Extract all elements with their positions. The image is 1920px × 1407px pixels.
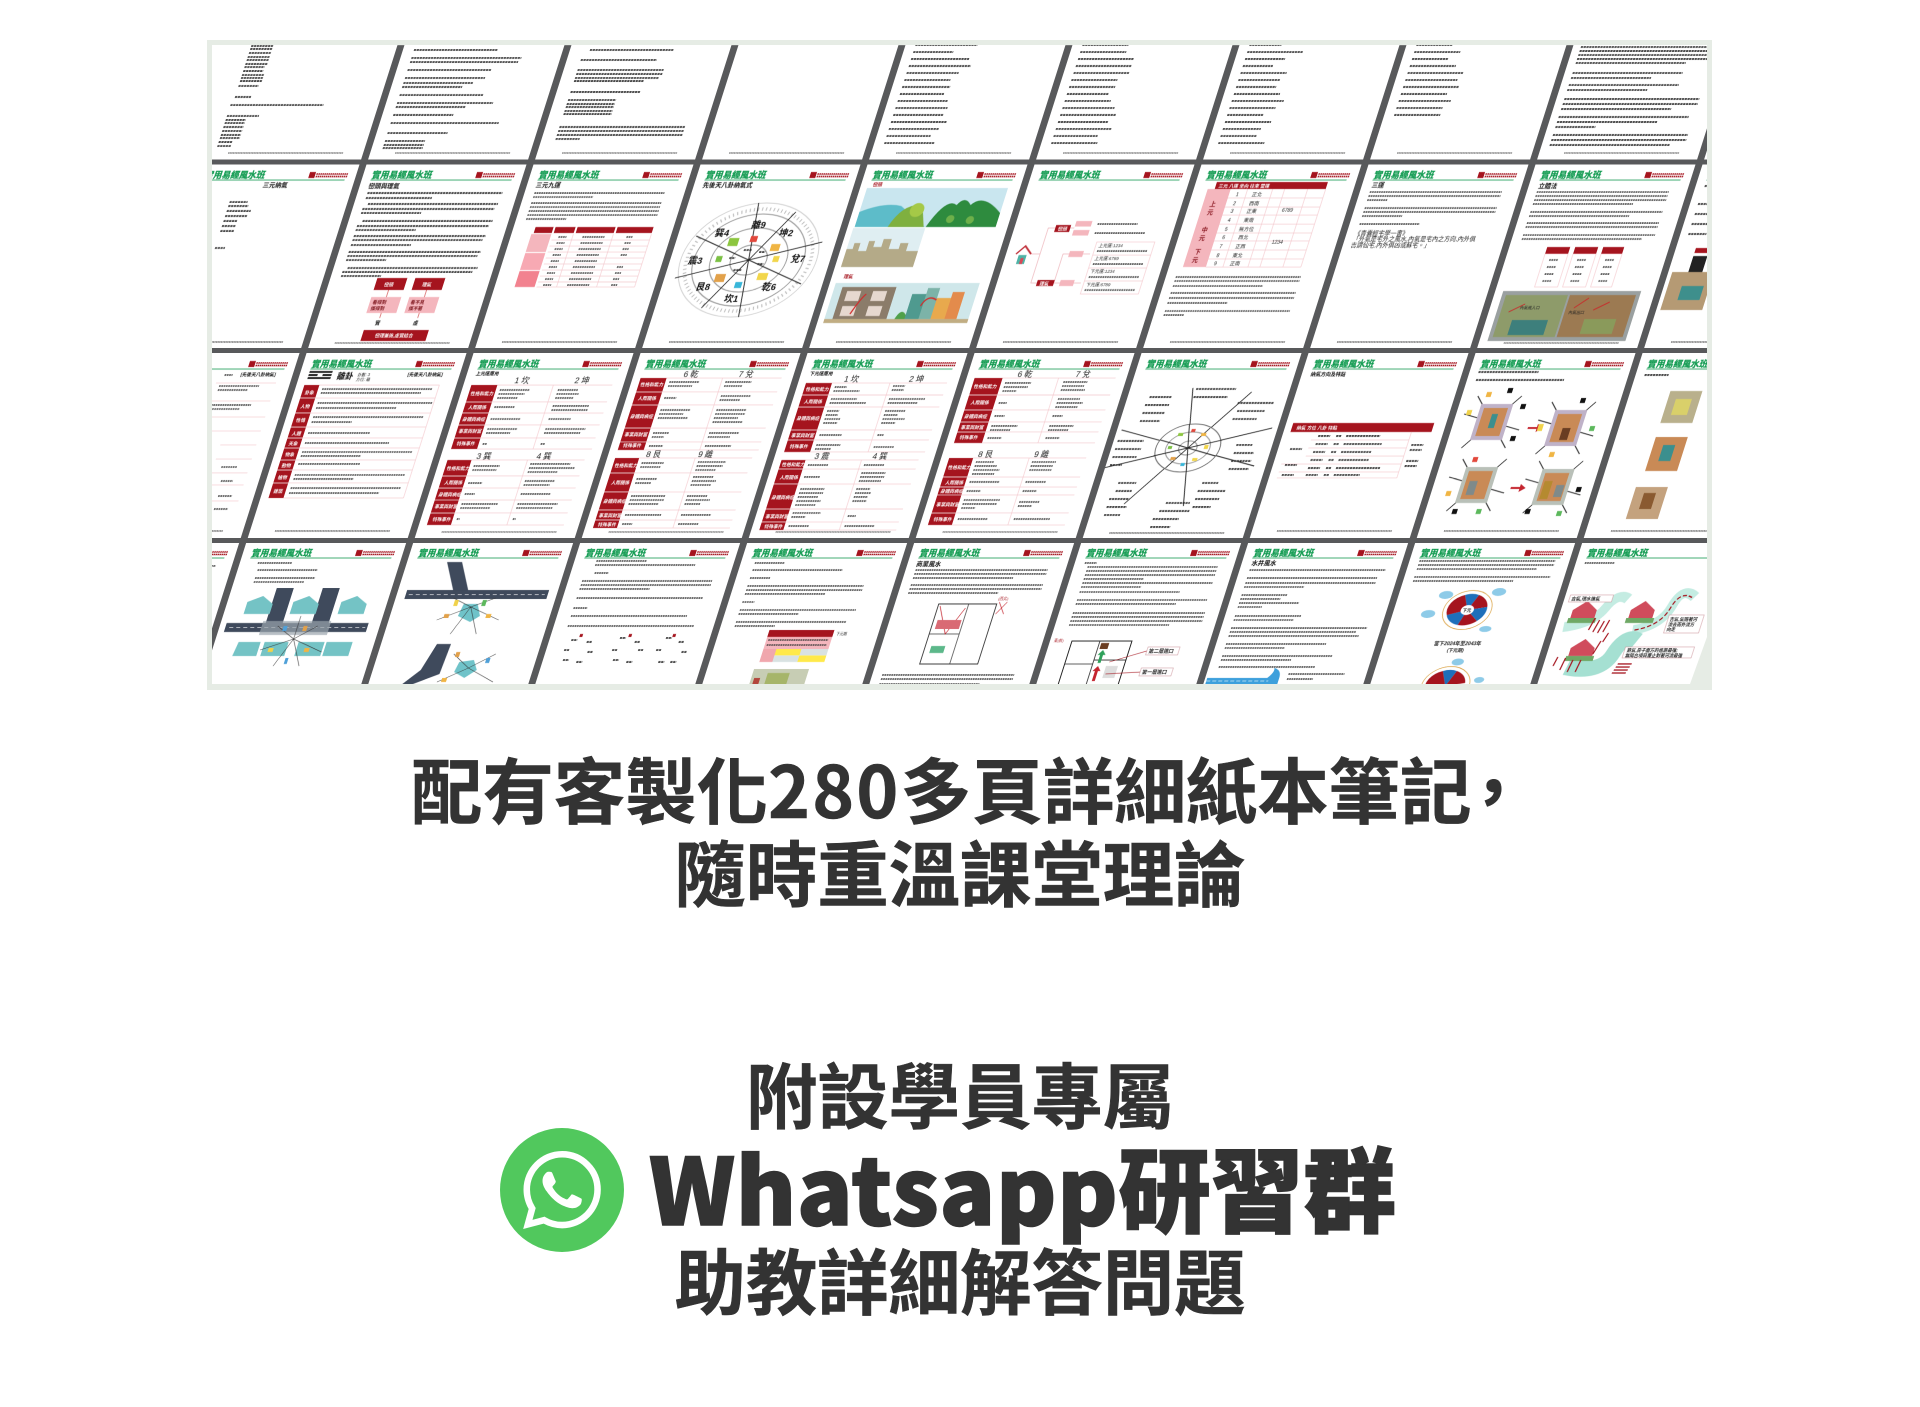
table: 2 — [1232, 201, 1237, 207]
table: 4 — [1227, 218, 1231, 224]
callout: rushing water: 煞氣,房子面方的進煞最強; — [1626, 647, 1679, 654]
page: 下元九運 1-4: 2 坤 — [908, 374, 925, 384]
page: floor plan: 商業風水 — [915, 559, 943, 568]
page: partial 納氣 table: 實用易經風水班 — [143, 358, 207, 369]
page: roads with houses — [213, 547, 397, 666]
page: 三運 text with quote: 三運 — [1371, 180, 1387, 189]
room illustration — [1487, 291, 1641, 341]
yuan list boxes: 上元運:1234 — [1098, 242, 1124, 249]
block upper: 身體與病症 — [461, 416, 487, 423]
page: 下元九運 6-9: 8 艮 — [977, 450, 994, 459]
table — [515, 227, 654, 287]
flow boxes: 摸得到 — [370, 305, 386, 312]
page: 立體法 with room: 立體法 — [1537, 181, 1559, 190]
page: 離卦: 卦數: 3 — [357, 371, 372, 377]
page: 先後天八卦納氣式 compass: 實用易經風水班 — [705, 169, 768, 180]
table — [1276, 423, 1434, 478]
block lower: 事業與財富 — [598, 512, 623, 519]
page: 上元九運 1-4: 上元運應用 — [475, 370, 500, 377]
page: 三元九運 table — [486, 169, 684, 342]
block upper: 性格和能力 — [470, 390, 495, 397]
page: 先後天八卦納氣式 compass — [653, 169, 851, 342]
page: radial chart — [1083, 358, 1294, 533]
room: top right — [1526, 398, 1605, 457]
page: 巒頭 illustrations: 理氣 — [843, 273, 854, 280]
page: 下元九運 1-4: 4 巽 — [871, 452, 889, 461]
page: tree diagram: 理氣 — [1039, 280, 1050, 287]
compass wheel: 震3 — [687, 256, 704, 266]
table — [1183, 182, 1328, 267]
gutters between pages — [196, 45, 1737, 690]
page: 下元九運 1-4: 3 震 — [813, 452, 831, 461]
page: roads with houses: 實用易經風水班 — [250, 547, 314, 558]
row 4 of note pages — [36, 547, 1731, 706]
table: 中 — [1200, 226, 1209, 234]
callout: rushing water: 無陽台項目應止對著河流最強 — [1624, 652, 1684, 659]
block lower: 身體與病症 — [771, 494, 796, 501]
hexagram — [308, 372, 333, 378]
page: 下元九運 6-9: 9 離 — [1033, 449, 1051, 459]
room: bottom right — [1514, 461, 1591, 516]
callout: good river: 吉氣,環水進氣 — [1570, 596, 1601, 602]
wheel caption — [1431, 640, 1482, 654]
page: 納氣方向及特點 table: 實用易經風水班 — [1312, 358, 1376, 369]
page: 下元九運 1-4: 下元運應用 — [809, 370, 834, 377]
page: flying star wheels: 實用易經風水班 — [1419, 547, 1483, 558]
block lower: 事業與財富 — [434, 503, 459, 510]
table — [1535, 247, 1624, 287]
flow boxes: 巒理兼施,虛實結合 — [374, 332, 414, 339]
heading: student group: 附設學員專屬 — [746, 1040, 1174, 1144]
radial wheel — [1091, 388, 1285, 506]
radial labels — [1090, 389, 1278, 527]
table: 納氣 方位 八卦 特點 — [1296, 425, 1339, 431]
block lower: 性格和能力 — [781, 461, 806, 468]
table: 元 — [1198, 235, 1206, 242]
block lower — [759, 460, 919, 530]
page: dense paragraphs — [1547, 47, 1716, 153]
wheel — [1415, 588, 1507, 632]
table: 正北 — [1251, 191, 1263, 198]
block upper — [954, 378, 1116, 443]
page: 上元九運 1-4: 4 巽 — [535, 452, 553, 461]
heading: notes line 2: 隨時重溫課堂理論 — [674, 818, 1246, 922]
callout: first floor entry: 第一層進口 — [1141, 669, 1168, 676]
callout: good river — [1568, 595, 1614, 602]
page: 三元納氣: 實用易經風水班 — [204, 169, 267, 180]
page: 三元 table: 實用易經風水班 — [1206, 169, 1269, 180]
plan with entries: 東(前) — [1053, 638, 1064, 643]
table: 6 — [1221, 235, 1226, 241]
quote: 《青囊經宅學一書》 — [1353, 229, 1410, 237]
table: 8 — [1215, 253, 1220, 259]
page: 下元九運 1-4 — [759, 358, 958, 532]
page: partial 納氣 table — [212, 360, 288, 532]
page: 巒頭 illustrations: 巒頭 — [872, 181, 884, 188]
callout: river note — [1664, 615, 1704, 633]
block lower — [427, 460, 585, 525]
flow boxes: 看得到 — [372, 299, 388, 306]
compass wheel: 艮8 — [694, 282, 712, 292]
heading: notes line 1: 配有客製化280多頁詳細紙本筆記， — [411, 735, 1529, 839]
building images — [823, 283, 980, 323]
page: 納氣方向及特點 table — [1259, 358, 1459, 531]
yuan list boxes — [1080, 242, 1155, 294]
block upper: 事業與財富 — [624, 431, 649, 438]
block lower: 事業與財富 — [764, 513, 790, 520]
page: 下元九運 1-4: 1 坎 — [843, 374, 860, 384]
callout: first floor entry — [1139, 668, 1173, 676]
block upper: 人際關係 — [467, 404, 488, 411]
table: 9 — [1213, 261, 1218, 267]
trait table — [268, 385, 439, 498]
flow boxes: 摸不著 — [408, 305, 424, 312]
table: 6789 — [1281, 208, 1294, 214]
water wave — [1205, 668, 1282, 685]
table: 5 — [1224, 227, 1229, 233]
trait table: 性情 — [295, 417, 307, 424]
room illustration: 內氣進入口 — [1519, 304, 1541, 310]
block lower: 人際關係 — [443, 479, 464, 486]
trait table: 人物 — [299, 403, 311, 410]
page: floor plan: 實用易經風水班 — [918, 547, 982, 558]
page: partial room strip — [1660, 179, 1707, 343]
table: 1 — [1235, 192, 1240, 198]
road lower — [400, 644, 505, 686]
trait table: 天象 — [288, 440, 299, 447]
page: tree diagram — [987, 169, 1185, 342]
page: 水井風水: 實用易經風水班 — [1252, 547, 1316, 558]
page: line list d — [1394, 45, 1512, 154]
wheel lower — [1415, 658, 1491, 706]
compass wheel — [674, 202, 822, 318]
room: bottom left — [1437, 457, 1515, 514]
block upper: 性格和能力 — [973, 383, 998, 390]
page: 上元九運 6-9: 8 艮 — [645, 450, 662, 459]
page: 立體法 with room: 實用易經風水班 — [1540, 169, 1603, 180]
table: 元 — [1191, 257, 1199, 264]
table: 正東 — [1245, 208, 1258, 215]
block lower: 人際關係 — [610, 479, 631, 486]
floor photo — [748, 669, 809, 689]
page: 上元九運 6-9: 6 乾 — [682, 369, 700, 379]
page: 三元 table — [1154, 169, 1352, 342]
table: 西北 — [1237, 234, 1249, 241]
wheel caption: (下元期) — [1446, 647, 1465, 654]
trait table: 人體 — [291, 430, 302, 437]
table: 三元 八運 坐向 往來 當運 — [1218, 183, 1271, 189]
quote — [1350, 229, 1479, 249]
yuan list boxes: 下元運:6789 — [1085, 281, 1112, 288]
compass wheel: 乾6 — [760, 281, 778, 292]
table: 1234 — [1271, 240, 1284, 246]
block upper: 人際關係 — [803, 398, 824, 405]
table: 西南 — [1248, 200, 1260, 207]
block upper: 特殊事件 — [456, 440, 476, 447]
page: 水井風水: 水井風水 — [1251, 558, 1279, 567]
page: 上元九運 6-9: 9 離 — [697, 449, 715, 459]
page: 三元納氣 — [212, 170, 348, 343]
page: list text — [217, 45, 344, 154]
table: 東南 — [1243, 217, 1255, 224]
plan: (西北) — [998, 596, 1010, 601]
page: 上元九運 1-4 — [425, 358, 624, 532]
road upper — [393, 562, 558, 634]
page: 下元九運 6-9: 實用易經風水班 — [978, 358, 1042, 369]
block lower: 事業與財富 — [935, 501, 961, 508]
block lower: 身體與病症 — [602, 498, 628, 505]
page: 離卦: 實用易經風水班 — [310, 358, 374, 369]
block lower: 性格和能力 — [947, 464, 972, 471]
block upper — [784, 383, 947, 452]
table: 東北 — [1231, 252, 1244, 259]
block upper: 身體與病症 — [796, 415, 821, 422]
compass wheel: 坎1 — [723, 293, 740, 304]
block lower: 特殊事件 — [933, 516, 953, 523]
page: floor plan — [878, 547, 1065, 684]
trait table: 物象 — [284, 451, 296, 458]
table: 正西 — [1234, 244, 1246, 250]
page: 離卦 — [258, 358, 457, 531]
page: room column: 實用易經風水班 — [1646, 358, 1710, 369]
page: 巒頭與理氣 — [319, 169, 517, 343]
flow boxes: 理氣 — [421, 281, 433, 288]
page: line list b — [1051, 45, 1178, 154]
row 1 of note pages: text pages — [215, 45, 1716, 153]
page: flying star wheels — [1372, 547, 1566, 706]
page: tree diagram: 實用易經風水班 — [1039, 169, 1102, 180]
compass wheel: 離9 — [750, 219, 768, 230]
callout: second floor entry — [1146, 647, 1180, 655]
trait table: 卦象 — [304, 389, 316, 396]
block lower: 性格和能力 — [614, 462, 639, 469]
trait table: 動物 — [281, 462, 292, 469]
arrow — [1526, 424, 1544, 432]
ring diagrams — [560, 634, 692, 662]
heading: tutor answers: 助教詳細解答問題 — [674, 1226, 1246, 1330]
page: text and position rings — [551, 547, 731, 662]
page: 離卦: [先後天八卦納氣] — [407, 371, 444, 378]
page: partial left page — [81, 550, 229, 566]
page: 離卦: 離卦 — [336, 371, 355, 381]
trait table: 建築 — [272, 488, 284, 495]
road map — [213, 588, 380, 666]
room: top left — [1453, 388, 1532, 448]
page: T junction roads — [377, 547, 564, 686]
page: numbered text 2 — [555, 49, 686, 154]
heading: whatsapp group: Whatsapp研習群 — [649, 1119, 1397, 1252]
arrow — [1509, 484, 1527, 492]
page: room column — [1595, 358, 1791, 531]
page: 上元九運 1-4: 1 坎 — [513, 375, 531, 385]
flow boxes — [357, 278, 445, 341]
block upper: 特殊事件 — [959, 434, 979, 441]
compass wheel: 巽4 — [714, 228, 732, 238]
flow boxes: 實 — [374, 320, 381, 327]
page: line list c — [1218, 45, 1346, 154]
flow boxes: 看不見 — [410, 299, 426, 306]
block upper: 事業與財富 — [457, 428, 483, 435]
page: 下元九運 6-9: 6 乾 — [1016, 369, 1034, 379]
page: T junction roads: 實用易經風水班 — [417, 547, 481, 558]
quote: 吉謂仙宅,內外俱凶或蘇宅。」 — [1350, 241, 1431, 249]
page: 三運 text with quote: 實用易經風水班 — [1373, 169, 1436, 180]
page: text and position rings: 實用易經風水班 — [584, 547, 648, 558]
block upper: 人際關係 — [970, 399, 991, 406]
page: 巒頭 illustrations — [817, 169, 1018, 342]
block upper — [618, 378, 782, 450]
flow boxes: 巒頭 — [383, 281, 395, 288]
page: entrance plan — [1040, 547, 1232, 685]
callout: second floor entry: 第二層進口 — [1148, 648, 1175, 655]
icon: whatsapp logo — [500, 1128, 624, 1252]
compass wheel: 坤2 — [778, 227, 795, 238]
page: partial room strip: 實用易經風水班 — [1707, 169, 1770, 180]
page: radial chart: 實用易經風水班 — [1145, 358, 1209, 369]
table: 無方位 — [1238, 226, 1255, 233]
page: 下元九運 1-4: 實用易經風水班 — [811, 358, 875, 369]
row 3 of note pages — [212, 358, 1707, 534]
block lower: 特殊事件 — [597, 521, 618, 528]
page: line list a — [884, 45, 1012, 154]
page: entrance plan: 實用易經風水班 — [1085, 547, 1149, 558]
row 2 of note pages — [212, 170, 1707, 344]
block lower: 特殊事件 — [763, 523, 784, 530]
page: 水井風水 — [1205, 547, 1399, 685]
compass wheel: 兌7 — [789, 253, 807, 264]
page: 立體法 with room — [1487, 169, 1686, 343]
quote: 「外氣是宅外之風水,內氣是宅內之方向,內外俱 — [1352, 235, 1477, 243]
block lower: 性格和能力 — [446, 465, 471, 472]
page: river and houses: 實用易經風水班 — [1586, 547, 1650, 558]
flow boxes: 虛 — [412, 320, 419, 327]
wheel caption: 當下2024年至2043年 — [1433, 640, 1482, 647]
page: 下元九運 6-9: 7 兌 — [1074, 369, 1092, 379]
page: 上元九運 6-9 — [592, 358, 791, 532]
block lower — [928, 458, 1086, 525]
block upper: 特殊事件 — [622, 442, 643, 449]
callout: river note: 流去而外流方 — [1667, 621, 1696, 628]
page: 下元九運 6-9 — [926, 358, 1125, 532]
page: 上元九運 6-9: 實用易經風水班 — [644, 358, 708, 369]
page: 三元納氣: 三元納氣 — [262, 180, 290, 189]
page: 上元九運 6-9: 7 兌 — [737, 369, 755, 379]
block upper: 事業與財富 — [960, 424, 985, 431]
page: 巒頭 illustrations: 實用易經風水班 — [872, 169, 935, 180]
block upper: 身體與病症 — [963, 413, 989, 420]
block upper: 特殊事件 — [789, 443, 810, 450]
rooms — [1626, 391, 1702, 519]
colored table — [759, 630, 849, 662]
page: 上元九運 1-4: 2 坤 — [573, 375, 591, 385]
page: tree diagram: 巒頭 — [1057, 226, 1069, 232]
page: 上元九運 1-4: 實用易經風水班 — [477, 358, 541, 369]
page: room diagrams: 實用易經風水班 — [1479, 358, 1543, 369]
wheel: 下元 — [1462, 608, 1473, 614]
plan with entries — [1040, 638, 1151, 685]
page: 先後天八卦納氣式 compass: 先後天八卦納氣式 — [702, 180, 755, 189]
table: 下 — [1193, 249, 1202, 256]
page: 巒頭與理氣: 巒頭與理氣 — [367, 181, 402, 190]
house icon — [1016, 244, 1032, 264]
page: numbered text — [382, 49, 522, 154]
page: text and small table — [710, 547, 898, 689]
block lower: 人際關係 — [944, 479, 965, 486]
page: 離卦: 方位: 離 — [355, 376, 371, 382]
page: 巒頭與理氣: 實用易經風水班 — [371, 169, 434, 180]
block lower — [593, 458, 752, 528]
table: 7 — [1218, 244, 1223, 250]
block lower: 人際關係 — [779, 474, 800, 481]
table: 上 — [1209, 200, 1217, 208]
room illustration: 內氣出口 — [1568, 309, 1585, 315]
callout: rushing water — [1622, 647, 1695, 659]
page: text and small table: 實用易經風水班 — [751, 547, 815, 558]
panel: skewed notebook pages collage — [207, 40, 1712, 1252]
block upper: 事業與財富 — [790, 432, 816, 439]
yuan list boxes: 上元運:6789 — [1094, 255, 1120, 262]
page: river and houses — [1546, 547, 1731, 673]
block upper: 身體與病症 — [629, 413, 655, 420]
yuan list boxes: 下元運:1234 — [1089, 268, 1116, 275]
page: partial 納氣 table: [先後天八卦納氣] — [240, 371, 277, 378]
block lower: 身體與病症 — [939, 488, 965, 495]
landscape images — [841, 188, 1008, 267]
block upper — [451, 385, 612, 449]
page: room diagrams — [1427, 358, 1626, 531]
block upper: 人際關係 — [637, 395, 658, 402]
page: 納氣方向及特點 table: 納氣方向及特點 — [1310, 371, 1347, 378]
trait table: 植物 — [277, 474, 289, 481]
callout: river note: 吉氣,氣隨著河 — [1669, 616, 1699, 623]
block upper: 性格和能力 — [639, 381, 665, 388]
river scene — [1549, 593, 1696, 673]
table: 元 — [1206, 209, 1214, 216]
block lower: 身體與病症 — [437, 491, 463, 498]
colored table: 下元期 — [836, 631, 848, 636]
page: 上元九運 1-4: 3 巽 — [475, 452, 493, 461]
page: blank — [729, 152, 844, 154]
table: 正南 — [1229, 260, 1241, 267]
callout: river note: 向走 — [1666, 626, 1677, 633]
block upper: 性格和能力 — [805, 386, 830, 393]
block lower: 特殊事件 — [432, 516, 452, 523]
table: 3 — [1229, 209, 1234, 215]
page: 三元九運 table: 三元九運 — [535, 180, 563, 189]
page: 三元九運 table: 實用易經風水班 — [538, 169, 601, 180]
page: 三運 text with quote — [1320, 169, 1519, 342]
plan — [920, 596, 1010, 664]
